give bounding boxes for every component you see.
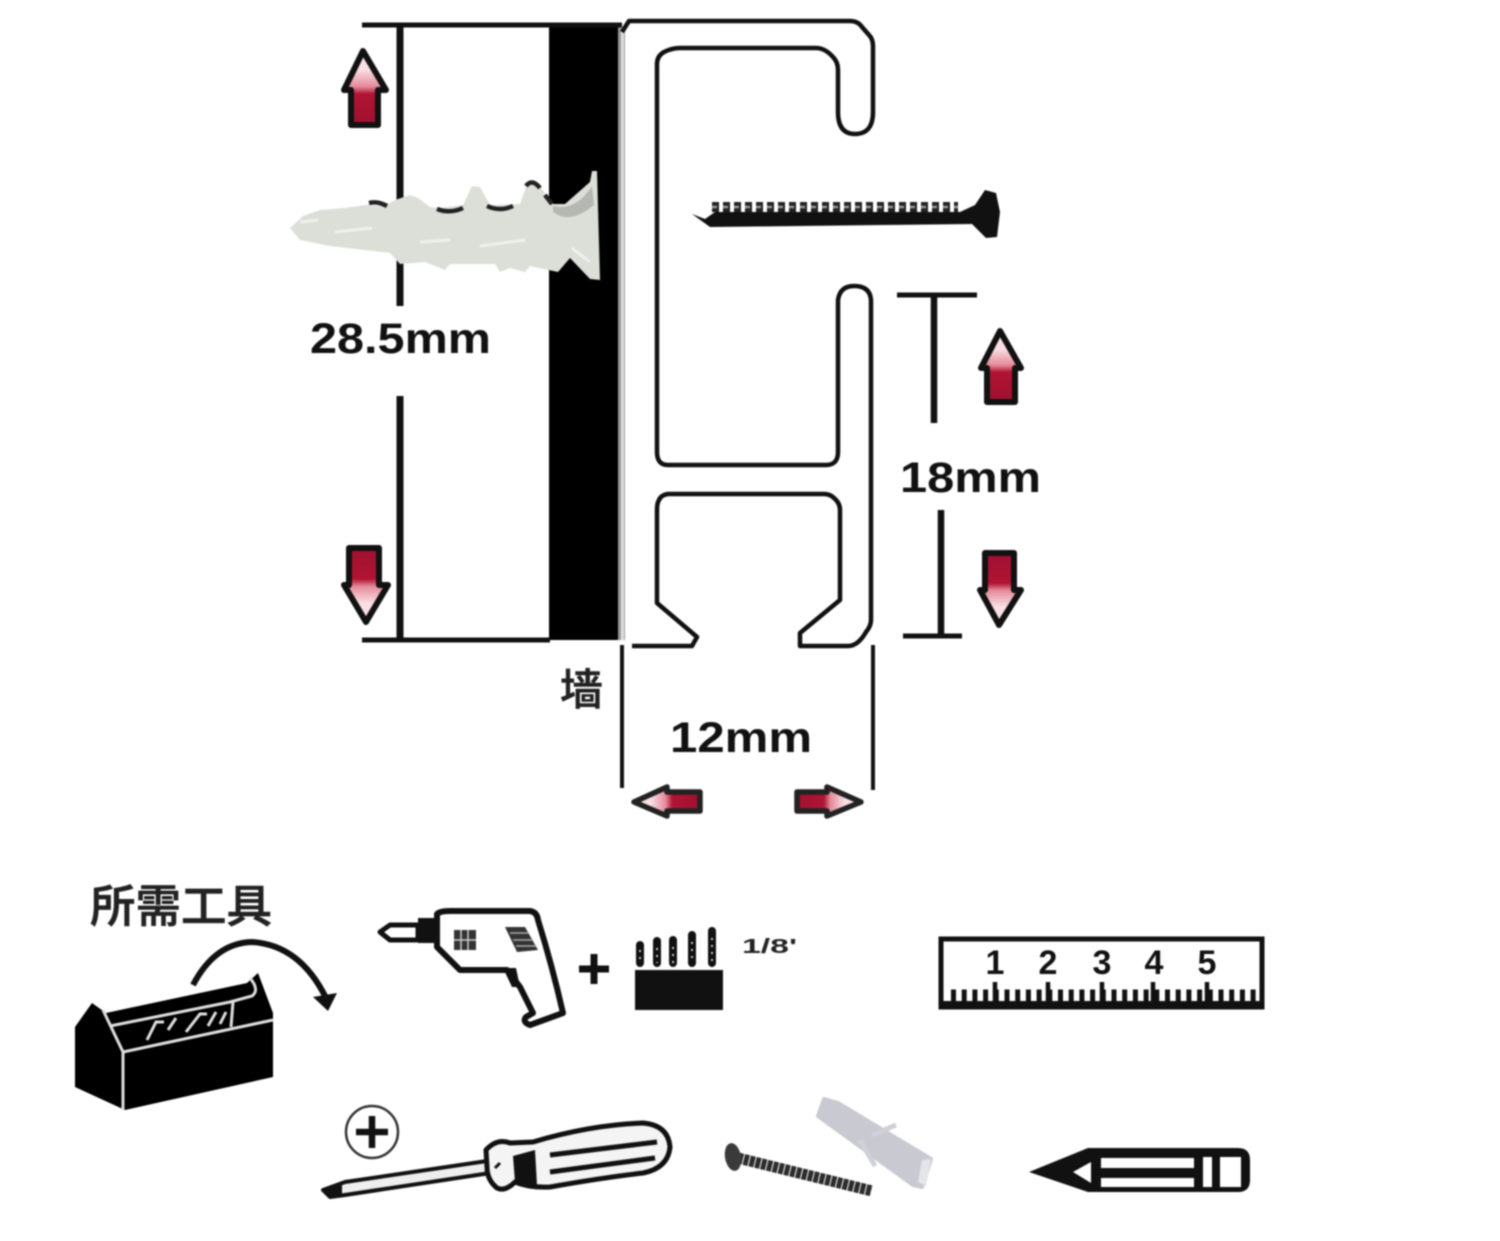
icon: ruler: 1 <box>986 944 1004 982</box>
arrow: left, 12mm <box>634 787 700 816</box>
icon: toolbox <box>75 973 273 1110</box>
icon: screw and plastic anchor <box>723 1099 931 1191</box>
dimension: 28.5mm height: 28.5mm <box>310 315 491 363</box>
icon: pencil <box>1029 1148 1250 1192</box>
wall anchor plug <box>290 171 600 280</box>
arrow: down, 18mm <box>980 553 1021 625</box>
icon: drill <box>380 911 563 1025</box>
icon: ruler <box>941 939 1262 1007</box>
icon: ruler: 5 <box>1198 944 1216 982</box>
dimension: 18mm height <box>897 295 1041 636</box>
arrow: right, 12mm <box>797 787 861 816</box>
label: drill bit size: 1/8' <box>742 936 797 958</box>
dimension: 18mm height: 18mm <box>900 454 1041 502</box>
arrow: down, 28.5mm <box>344 548 388 622</box>
icon: ruler: 2 <box>1039 944 1057 982</box>
icon: drill bit set <box>635 931 723 1010</box>
wood screw <box>692 190 1000 238</box>
arrow: curved from toolbox <box>193 942 337 1011</box>
arrow: up, 28.5mm <box>344 51 386 125</box>
rail profile <box>622 21 873 646</box>
icon: ruler: 3 <box>1093 944 1111 982</box>
label: wall: 墙 <box>560 667 603 715</box>
dimension: 28.5mm height <box>310 25 622 640</box>
icon: ruler: 4 <box>1145 944 1164 982</box>
icon: screwdriver <box>323 1123 670 1197</box>
wall section <box>549 25 625 640</box>
heading: required tools: 所需工具 <box>90 881 272 932</box>
icon: phillips symbol <box>346 1106 398 1158</box>
dimension: 12mm width <box>622 645 873 790</box>
dimension: 12mm width: 12mm <box>670 714 812 762</box>
arrow: up, 18mm <box>981 331 1021 402</box>
icon: plus sign <box>579 954 609 984</box>
